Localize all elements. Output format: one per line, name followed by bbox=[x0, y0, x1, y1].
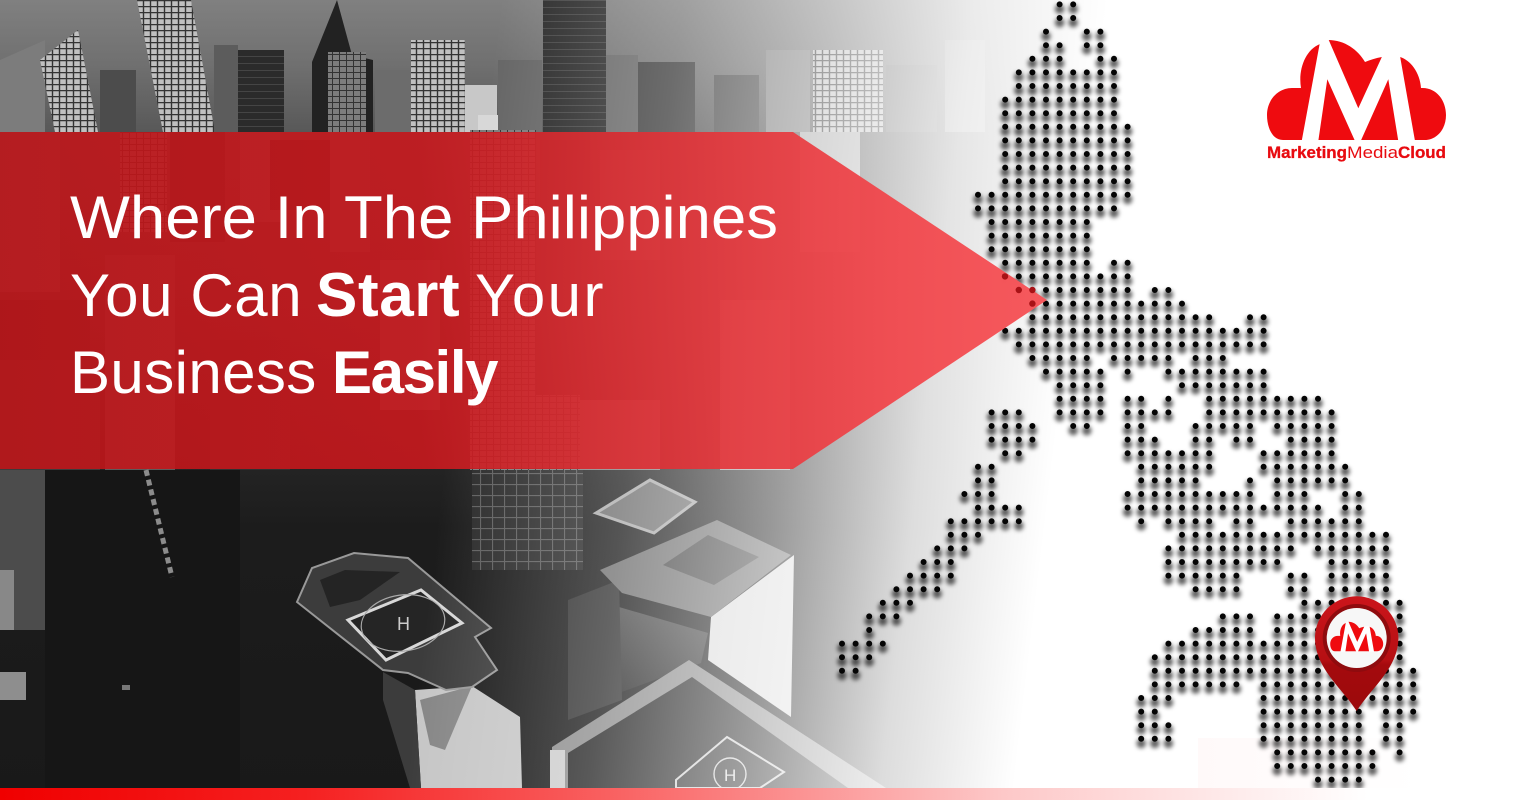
logo wordmark: Media bbox=[1347, 143, 1399, 162]
red arrow banner bbox=[0, 132, 1047, 469]
helipad tower: H bbox=[397, 614, 410, 634]
dotted map of the Philippines bbox=[842, 4, 1416, 784]
right tower with rooftop bbox=[568, 520, 794, 720]
bottom gradient bar bbox=[0, 788, 1520, 800]
white roof block bbox=[596, 480, 695, 533]
line 2: Your bbox=[475, 262, 606, 329]
logo wordmark: Cloud bbox=[1398, 143, 1446, 162]
dots bbox=[842, 4, 1416, 780]
logo wordmark bbox=[1267, 143, 1446, 162]
faint pink block bbox=[1198, 738, 1420, 788]
helipad tower bbox=[297, 553, 522, 788]
logo cloud mark bbox=[1267, 39, 1446, 141]
grid facade building bbox=[472, 470, 583, 570]
headline bbox=[70, 184, 778, 406]
line 2: You Can bbox=[70, 262, 302, 329]
map location pin bbox=[1315, 596, 1398, 711]
logo: Marketing Media Cloud bbox=[1267, 39, 1446, 162]
pin logo bbox=[1330, 621, 1383, 652]
line 3: Business bbox=[70, 339, 317, 406]
lower tower with helipad roof bbox=[550, 660, 886, 790]
line 1: Where In The Philippines bbox=[70, 184, 778, 251]
line 3: Easily bbox=[332, 339, 499, 406]
line 2: Start bbox=[316, 261, 460, 330]
lower tower with helipad roof: H bbox=[724, 766, 736, 785]
skyline towers bbox=[0, 0, 985, 132]
dots tinted by the arrow tip bbox=[1002, 273, 1036, 307]
left edge roofs bbox=[0, 470, 240, 800]
towers seen through the banner bbox=[0, 130, 860, 470]
logo wordmark: Marketing bbox=[1267, 143, 1347, 162]
dot shadows bbox=[842, 9, 1416, 784]
